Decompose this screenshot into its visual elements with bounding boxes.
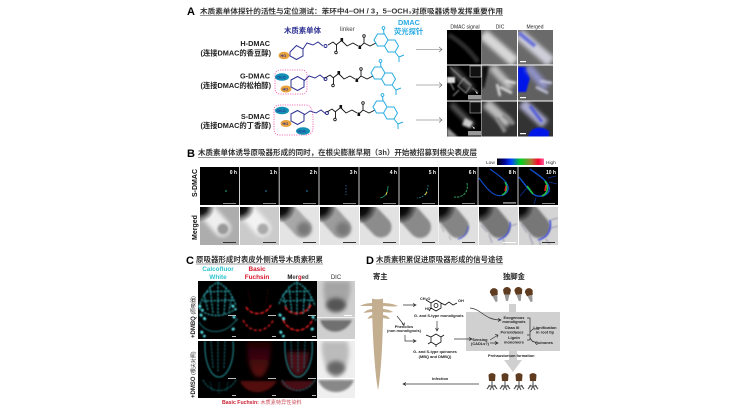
molecule: S-DMAC: CH₃O (276, 109, 286, 113)
panel A: probe activity (187, 6, 553, 137)
S-DMAC panel row: 2 h (310, 170, 317, 176)
micrographs: DMBQ DIC (317, 281, 355, 339)
S-DMAC panel row: 4 h (390, 170, 397, 176)
micrographs: S-DMAC row (447, 101, 553, 137)
colour scale: High (546, 160, 556, 166)
root frame 10 h (519, 207, 558, 245)
molecule: H-DMAC: HO (280, 54, 286, 58)
S-DMAC panel row: 10 h (546, 170, 556, 176)
S-DMAC panel row: 5 h (429, 170, 436, 176)
Striga seeds top (489, 287, 535, 303)
micrographs: H-DMAC row (447, 30, 553, 65)
text: box labels: Quinones (535, 340, 553, 345)
label: G-DMAC: G-DMAC (240, 72, 271, 80)
molecule: H-DMAC (278, 27, 404, 62)
label: monolignol: 木质素单体 (284, 26, 322, 35)
label: Basic Fuchsin: Basic (248, 266, 266, 273)
S-DMAC panel row: 3 h (350, 170, 357, 176)
S-DMAC panel row: 6 h (469, 170, 476, 176)
heading B: 木质素单体诱导原吸器形成的同时，在根尖膨胀早期（3h）开始被招募到根尖表皮层 (198, 147, 477, 157)
text: monolignols: OH (458, 298, 464, 303)
S-DMAC panel row: 0 h (230, 170, 237, 176)
root frame 3 h (320, 207, 359, 245)
text: box labels: in root tip (536, 330, 555, 334)
panel C: lignin accumulation (186, 254, 355, 406)
label: S-DMAC: S-DMAC (241, 112, 271, 121)
text: monolignols (414, 296, 464, 318)
heading B: B (187, 148, 195, 160)
label: DMAC fluorescent probe: DMAC (398, 18, 421, 27)
label: Basic Fuchsin (245, 266, 269, 281)
root frame 0 h (200, 207, 239, 245)
root frame 8 h (479, 207, 518, 245)
merged DMSO (287, 352, 309, 376)
molecule: S-DMAC: OCH₃ (298, 130, 307, 134)
label: G-DMAC: (连接DMAC的松柏醇) (200, 81, 272, 90)
text: box labels: monomers (504, 340, 524, 344)
fuchsin DMBQ (243, 290, 274, 330)
label: G-DMAC (200, 72, 272, 90)
root frame 4 h (360, 207, 399, 245)
label: host: 寄主 (373, 272, 388, 281)
heading A: A (187, 6, 195, 18)
molecule: G-DMAC: HO (282, 88, 288, 92)
text: quinones (413, 349, 457, 359)
label: H-DMAC (200, 39, 272, 58)
fuchsin DMSO (247, 341, 271, 377)
text: sensing: (CADLs?) (471, 341, 490, 346)
molecule: G-DMAC: CH₃O (276, 76, 286, 80)
Striga haustoria bottom (487, 373, 538, 390)
text: sensing (471, 337, 490, 346)
label: S-DMAC: (连接DMAC的丁香醇) (200, 121, 272, 130)
column headers: DMAC signal (450, 24, 480, 30)
text: quinones: G- and S-type quinones (413, 349, 457, 354)
text: monolignols: CH₃O (420, 296, 430, 301)
text: box labels: Exogenous (504, 315, 524, 320)
column headers (450, 24, 544, 30)
label: S-DMAC (200, 112, 272, 130)
heading C: 原吸器形成时表皮外侧诱导木质素积累 (196, 254, 323, 264)
heading D (366, 254, 503, 267)
label: Calcofluor White: White (209, 274, 227, 281)
label: Calcofluor White: Calcofluor (202, 266, 234, 273)
column headers: Merged (527, 24, 544, 30)
root frame 5 h (400, 207, 438, 245)
text: monolignols: HO (425, 306, 431, 311)
molecule: quinones (426, 334, 444, 347)
column headers: DIC (496, 24, 505, 30)
text: box labels: Lignification (533, 325, 557, 330)
big arrow out of box (504, 351, 522, 372)
micrographs: G-DMAC row (447, 65, 553, 101)
label: H-DMAC: H-DMAC (240, 39, 271, 48)
root frame 6 h (439, 207, 478, 245)
panel B: time course (185, 147, 558, 245)
label: DMAC fluorescent probe: 荧光探针 (394, 27, 423, 36)
text: box labels: Lignin (508, 335, 520, 340)
label: H-DMAC: (连接DMAC的香豆醇) (200, 48, 272, 58)
text: monolignols: G- and S-type monolignols (414, 313, 464, 318)
grey pathway box (466, 312, 560, 351)
molecule: S-DMAC (274, 94, 403, 135)
heading A (187, 6, 503, 18)
molecule: S-DMAC: HO (282, 122, 288, 126)
text: box labels: monolignols (502, 319, 526, 324)
root frame 1 h (240, 207, 279, 245)
heading B (187, 147, 477, 160)
colour scale (486, 158, 556, 166)
text: sensing: Sensing (472, 337, 488, 342)
colour scale: Low (486, 160, 495, 166)
text: phenolics: Phenolics (395, 324, 413, 329)
S-DMAC panel row: 8 h (509, 170, 516, 176)
S-DMAC panel row: 1 h (270, 170, 277, 176)
text: infection: Infection (432, 376, 449, 381)
label: DIC: DIC (331, 275, 342, 281)
text: box labels: Peroxidases (501, 330, 523, 334)
heading C (186, 254, 323, 267)
label: Striga: 独脚金 (503, 272, 526, 281)
big arrow into box (509, 304, 516, 312)
heading D: D (366, 255, 374, 267)
caption: Basic Fuchsin: Basic Fuchsin: 木质素特异性染料 (222, 398, 302, 406)
heading C: C (186, 255, 194, 267)
host root (360, 298, 398, 390)
row label: +DMBQ: +DMBQ (原吸器) (191, 296, 197, 338)
row label: +DMSO: +DMSO (根尖对照) (190, 351, 197, 398)
label: Merged: Merged (287, 275, 309, 281)
heading D: 木质素积累促进原吸器形成的信号途径 (376, 254, 503, 264)
text: box labels (501, 315, 557, 345)
calcofluor DMSO (203, 341, 236, 394)
row label Merged: Merged (192, 215, 199, 240)
text: prehaustorium: Prehaustorium formation (488, 353, 535, 358)
text: phenolics: (non monolignols) (387, 328, 422, 333)
arrows to micrographs (416, 47, 442, 122)
S-DMAC panel row (200, 167, 558, 205)
text: quinones: (MBQ and DMBQ) (419, 354, 452, 359)
root frame 2 h (280, 207, 319, 245)
row label S-DMAC: S-DMAC (192, 169, 199, 197)
text: box labels: Class III (505, 325, 519, 330)
molecule: G-DMAC (275, 60, 401, 95)
Merged panel row (185, 190, 558, 245)
panel D: signalling pathway (360, 254, 560, 390)
calcofluor DMBQ (199, 282, 237, 337)
micrographs: DMSO row (198, 341, 317, 398)
label: Basic Fuchsin: Fuchsin (245, 274, 269, 281)
label: linker: linker (340, 26, 355, 33)
label: DMAC fluorescent probe (394, 18, 423, 36)
molecule: monolignols (426, 300, 457, 311)
micrographs: DMSO DIC (317, 341, 355, 398)
text: phenolics (387, 324, 422, 333)
heading A: 木质素单体探针的活性与定位测试：苯环中4−OH / 3，5−OCH₃对原吸器诱导发挥重要作用 (200, 6, 503, 16)
label: Calcofluor White (202, 266, 234, 281)
merged DMBQ (279, 282, 316, 337)
micrographs: DMBQ row (198, 281, 317, 339)
pathway arrows (397, 304, 537, 386)
